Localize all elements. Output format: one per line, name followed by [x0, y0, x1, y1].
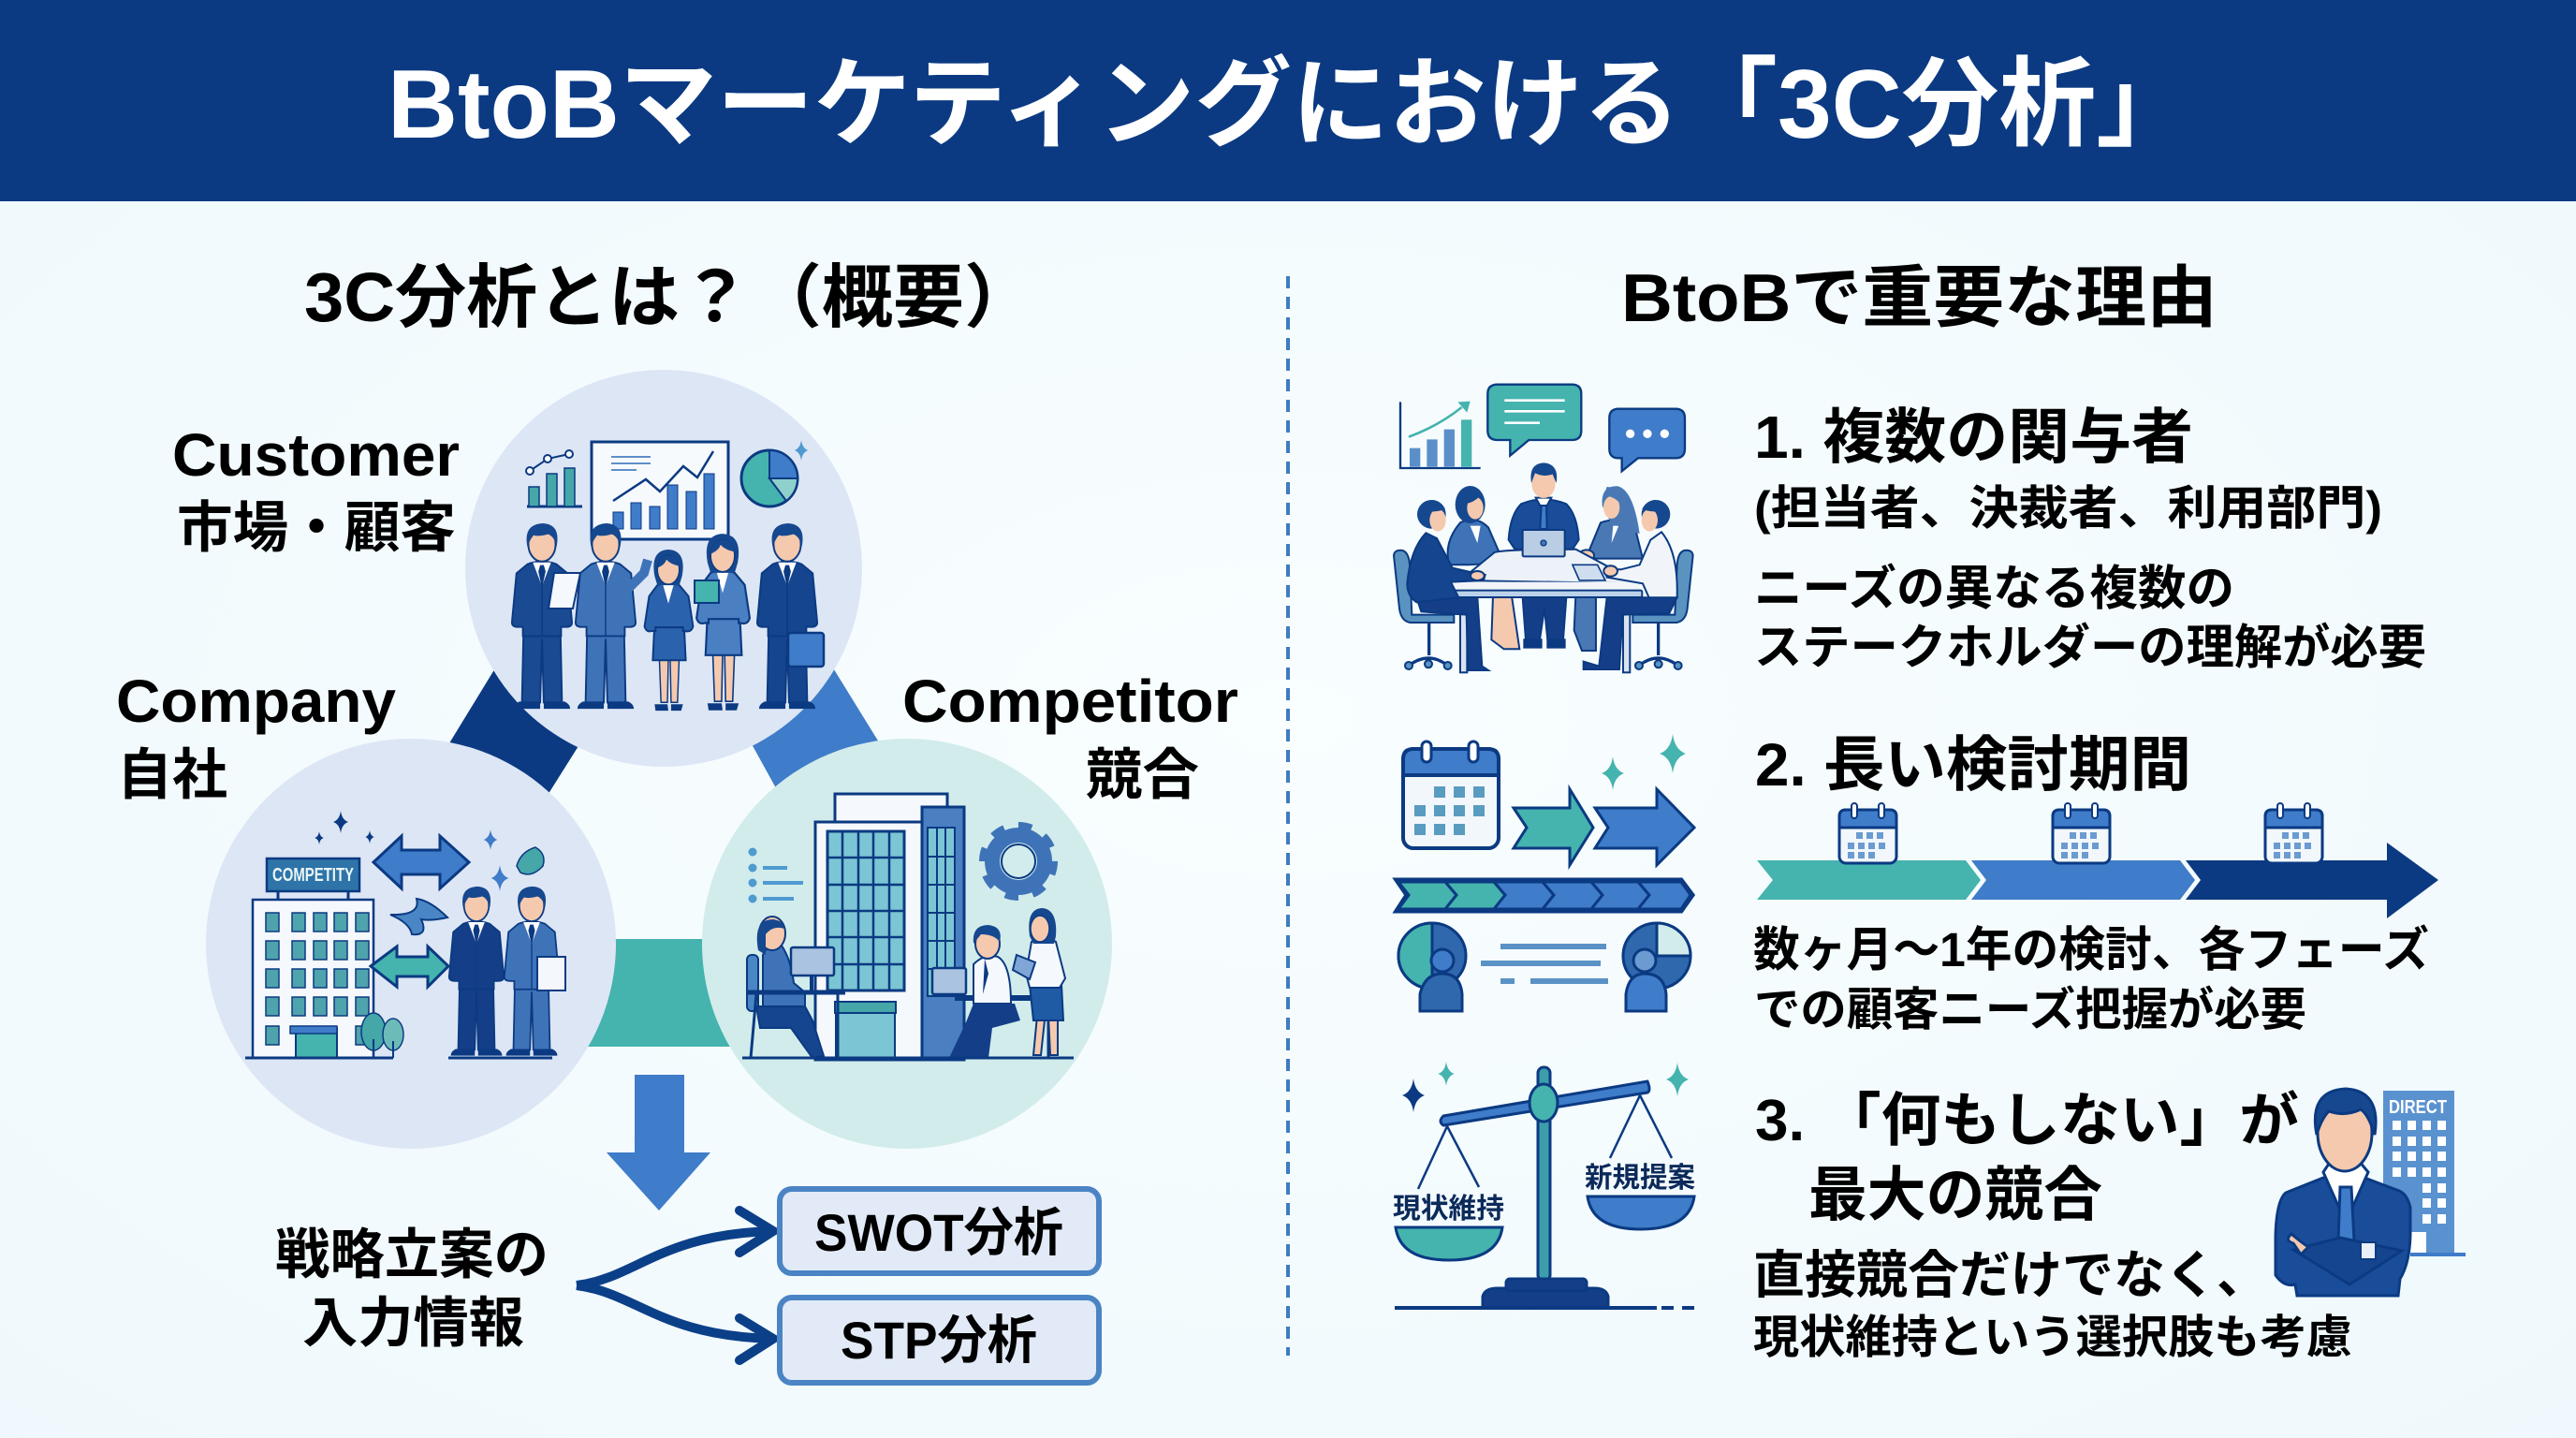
- seated woman at desk: [747, 917, 845, 1058]
- text: reason 1 body: ステークホルダーの理解が必要: [1754, 621, 2426, 674]
- icon: balance scale: [1393, 1062, 1695, 1308]
- header banner: [0, 0, 2576, 201]
- sparkle: [795, 440, 808, 461]
- scale post and base: [1483, 1067, 1608, 1308]
- building: [2383, 1091, 2466, 1256]
- box: SWOT analysis: SWOT分析: [814, 1203, 1063, 1262]
- illustration: competitor scene: [742, 794, 1074, 1060]
- panel: reason 2: [1397, 731, 2438, 1035]
- sparkles: [315, 811, 508, 891]
- label: status quo: 現状維持: [1393, 1194, 1504, 1225]
- building: DIRECT: [2389, 1097, 2447, 1118]
- text: reason 3 heading: 最大の競合: [1808, 1163, 2102, 1228]
- small bar chart: [526, 450, 582, 506]
- arrow: down to strategy: [607, 1075, 710, 1211]
- seated man with laptop: [932, 925, 1050, 1058]
- text: reason 1 sub heading: (担当者、決裁者、利用部門): [1754, 482, 2382, 535]
- icon: calendar and process: [1397, 734, 1694, 1011]
- gear icon: [984, 827, 1053, 896]
- leaf shape: [517, 847, 544, 874]
- text: input for strategy planning: 戦略立案の: [275, 1225, 549, 1285]
- illustration: businessman and building: [2276, 1089, 2466, 1296]
- trees: [361, 1013, 403, 1058]
- office chairs: [1394, 550, 1693, 669]
- businessman: [2276, 1089, 2410, 1296]
- connector: company to competitor: [562, 939, 758, 1047]
- connecting lines: [1481, 946, 1608, 981]
- text: reason 3 heading: 3. 「何もしない」が: [1755, 1089, 2299, 1153]
- connector: customer to competitor: [721, 623, 908, 841]
- text: reason 3 body: 現状維持という選択肢も考慮: [1753, 1313, 2352, 1363]
- text: reason 1 body: ニーズの異なる複数の: [1754, 562, 2234, 615]
- checklist marks: [749, 848, 803, 902]
- title: BtoBマーケティングにおける「3C分析」: [388, 51, 2193, 159]
- left pan: [1396, 1227, 1502, 1260]
- text: reason 3 body: [1753, 1246, 2352, 1363]
- pivot: [1530, 1084, 1558, 1122]
- timeline arrow: [1757, 803, 2438, 918]
- company building: [253, 900, 373, 1058]
- man centre: [1509, 462, 1605, 648]
- ground line: [245, 1056, 552, 1060]
- pan strings: [1418, 1095, 1672, 1189]
- label: new proposal: 新規提案: [1585, 1163, 1695, 1194]
- text: reason 2 body: [1753, 923, 2429, 1035]
- customer persona left: [1398, 923, 1466, 1011]
- double arrow: blue: [373, 836, 469, 888]
- icon: meeting scene: [1394, 385, 1693, 672]
- box: SWOT analysis: [780, 1189, 1099, 1273]
- teal arrow: [1514, 789, 1593, 865]
- text: reason 1 heading: 1. 複数の関与者: [1754, 404, 2193, 471]
- circle: competitor: [702, 739, 1112, 1149]
- right pan: [1588, 1196, 1694, 1229]
- text: reason 2 heading: 2. 長い検討期間: [1755, 731, 2191, 799]
- balance beam: [1441, 1081, 1649, 1125]
- ground line: [742, 1056, 1074, 1060]
- illustration: customer market scene: [512, 440, 824, 711]
- big calendar: [1403, 741, 1499, 848]
- growth chart: [1400, 402, 1481, 468]
- business people group: [512, 523, 824, 711]
- text: reason 1 body: [1754, 562, 2426, 674]
- text: reason 3 body: 直接競合だけでなく、: [1753, 1246, 2268, 1304]
- text: reason 3 heading: [1755, 1089, 2299, 1228]
- text: input for strategy planning: [275, 1225, 549, 1354]
- heading: why it matters in BtoB: BtoBで重要な理由: [1621, 261, 2217, 336]
- label: competitor in Japanese: 競合: [1086, 744, 1199, 806]
- timeline calendars: [1839, 803, 2322, 863]
- text: reason 2 body: での顧客ニーズ把握が必要: [1754, 985, 2306, 1035]
- forked arrows: [577, 1211, 773, 1360]
- label: market and customers: 市場・顧客: [177, 497, 456, 559]
- sparkles: [1602, 734, 1686, 790]
- label: Competitor: Competitor: [902, 668, 1238, 735]
- heading: 3C overview: 3C分析とは？（概要）: [304, 258, 1035, 336]
- double arrow: teal: [371, 946, 448, 987]
- woman left: [1448, 486, 1519, 649]
- illustration: company scene: [245, 811, 565, 1058]
- circle: company: [206, 739, 616, 1149]
- sparkles: [1402, 1062, 1689, 1112]
- panel: 3C diagram: [116, 370, 1238, 1383]
- centre dashed divider: [1286, 276, 1290, 1356]
- two business men: [449, 887, 565, 1056]
- woman right: [1574, 486, 1643, 651]
- panel: reason 1: [1394, 385, 2426, 674]
- presentation board: [592, 442, 728, 539]
- panel: reason 3: [1393, 1062, 2466, 1363]
- customer persona right: [1623, 923, 1690, 1011]
- label: Company: Company: [116, 668, 396, 735]
- speech bubble: teal: [1487, 385, 1581, 456]
- ground line: [1395, 1306, 1694, 1310]
- abstract wave shape: [390, 899, 447, 934]
- label: own company: 自社: [117, 744, 227, 806]
- box: STP analysis: [780, 1298, 1099, 1383]
- text: input for strategy planning: 入力情報: [302, 1293, 524, 1354]
- connector: customer to company: [421, 621, 608, 832]
- man right: [1584, 500, 1677, 669]
- speech bubble: blue: [1609, 409, 1685, 471]
- building sign: COMPETITY: [272, 865, 354, 886]
- text: reason 2 body: 数ヶ月〜1年の検討、各フェーズ: [1753, 923, 2429, 976]
- circle: customer: [465, 370, 862, 767]
- blue arrow: [1595, 789, 1694, 865]
- box: STP analysis: STP分析: [841, 1311, 1037, 1370]
- standing woman with tablet: [1013, 908, 1065, 1055]
- man left: [1407, 500, 1488, 670]
- building sign: [267, 858, 359, 900]
- chevron band: [1397, 880, 1692, 911]
- office tower: [815, 794, 964, 1060]
- table with legs: [1446, 550, 1642, 672]
- pie chart: [741, 450, 798, 506]
- label: Customer: Customer: [172, 421, 460, 489]
